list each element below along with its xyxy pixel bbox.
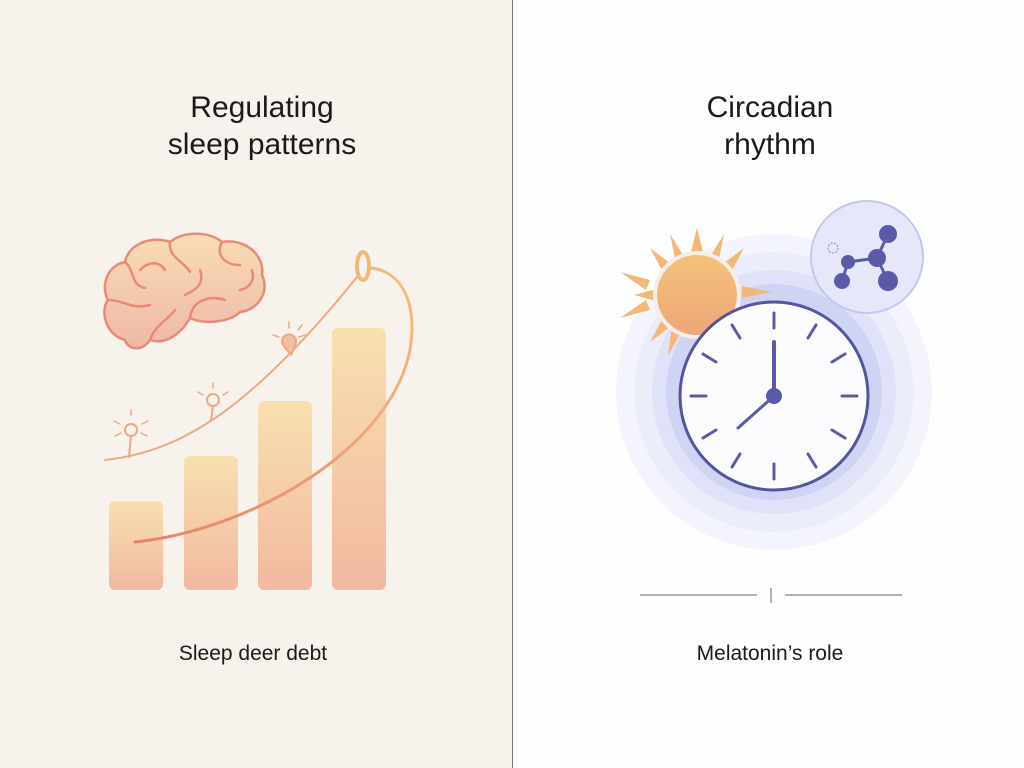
title: left: sleep patterns	[168, 128, 356, 161]
caption: left: Sleep deer debt	[179, 642, 327, 665]
upper trend line with bulbs	[105, 277, 357, 460]
divider: right	[640, 588, 902, 603]
icon: brain	[104, 234, 265, 348]
halo rings	[616, 234, 932, 550]
title: left: Regulating	[190, 91, 334, 124]
caption: right: Melatonin’s role	[697, 642, 843, 665]
lower curve with ring	[135, 252, 412, 542]
title: right: Circadian	[707, 91, 833, 124]
icon: sun	[620, 228, 772, 356]
title: right	[707, 91, 833, 161]
title: right: rhythm	[724, 128, 816, 161]
icon: molecule	[811, 201, 923, 313]
title: left	[168, 91, 356, 161]
icon: clock	[680, 302, 868, 490]
bar chart	[109, 328, 386, 590]
